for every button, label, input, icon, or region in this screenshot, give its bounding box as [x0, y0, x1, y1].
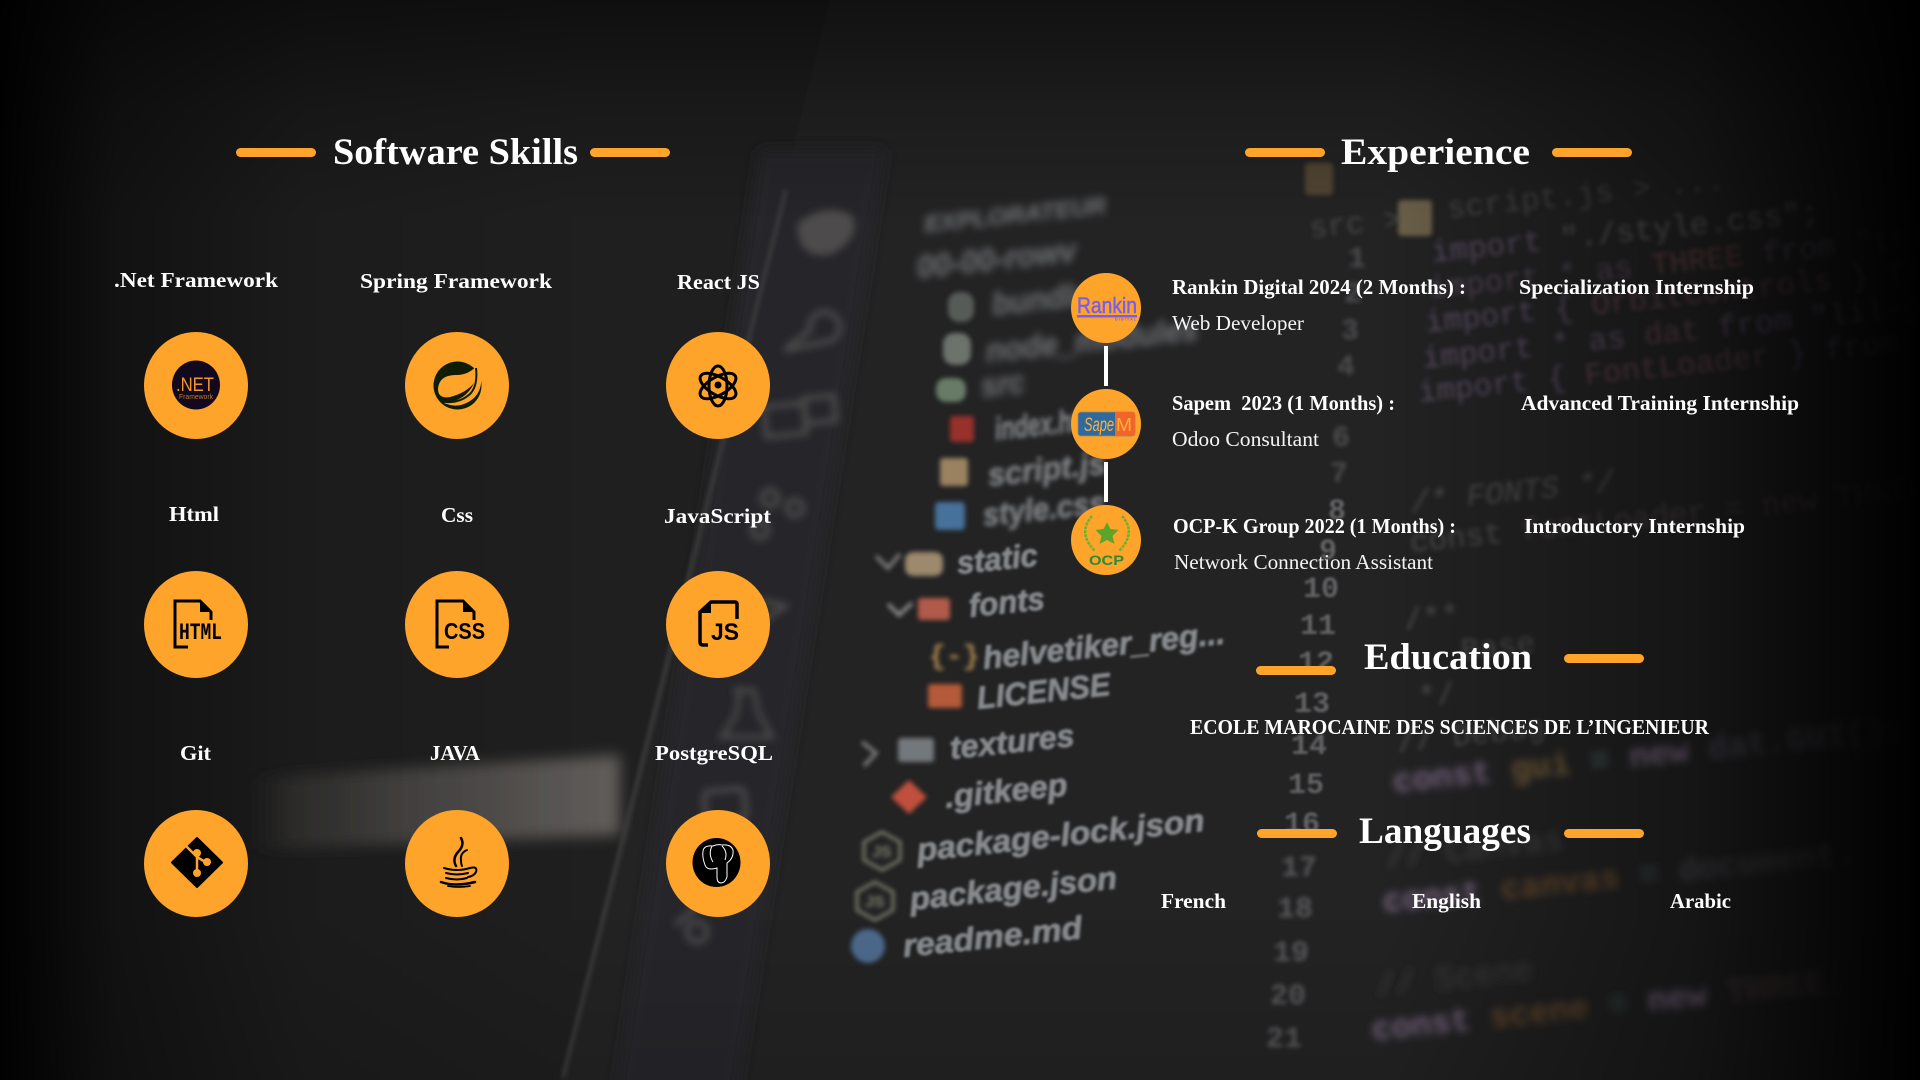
icon: Rankin Digital logo: [1071, 273, 1141, 343]
icon: PostgreSQL elephant: [666, 810, 770, 917]
text: languages list: [1161, 889, 1731, 913]
background: line numbers: 15: [1288, 769, 1324, 803]
icon: Sapem logo: Sape: [1084, 415, 1114, 436]
background: code lines: /* FONTS */: [1409, 466, 1618, 522]
background: file icons: {-}: [929, 642, 979, 673]
background: line numbers: 2: [1344, 278, 1362, 312]
background: explorer file tree: fonts: [967, 580, 1046, 624]
icon: Sapem logo: M: [1116, 415, 1132, 435]
background: code lines: // Scene: [1374, 953, 1536, 1006]
heading: Education: Education: [1364, 637, 1532, 678]
icon: OCP logo: [1071, 505, 1141, 575]
entry: Rankin Digital: [1172, 275, 1754, 335]
text: school name: ECOLE MAROCAINE DES SCIENCES DE L’INGENIEUR: [1190, 715, 1710, 739]
background: code lines: /**: [1402, 599, 1462, 640]
background: code lines: const fontLoader = new THREE: [1408, 473, 1920, 562]
background: code lines: // Debug: [1395, 712, 1547, 762]
heading: Software Skills: Software Skills: [333, 132, 578, 173]
background: line numbers: 11: [1300, 610, 1336, 644]
icon: Java cup: [405, 810, 509, 917]
icon: JS file: JS: [711, 619, 739, 646]
label: PostgreSQL: PostgreSQL: [655, 741, 773, 765]
icon: CSS file: CSS: [444, 618, 485, 644]
icon: Git diamond: [144, 810, 248, 917]
background: explorer file tree: 00-00-rowv: [915, 232, 1080, 285]
entry: Rankin Digital: Rankin Digital 2024 (2 Months) :: [1172, 275, 1466, 299]
entry: Sapem: Odoo Consultant: [1172, 427, 1319, 451]
background: code lines: */: [1416, 678, 1457, 717]
background: explorer file tree: src: [979, 364, 1027, 404]
icon: Sapem logo: [1071, 389, 1141, 459]
background: explorer file tree: LICENSE: [975, 666, 1114, 716]
background: file icons: JS: [872, 844, 892, 861]
icon: Spring leaf: [405, 332, 509, 439]
background: explorer file tree: helvetiker_reg...: [981, 615, 1226, 676]
label: JAVA: JAVA: [430, 741, 481, 765]
background: code lines: Base: [1459, 627, 1537, 670]
panel: software skills grid: [114, 268, 773, 917]
background: line numbers: 13: [1294, 688, 1330, 722]
connector: [1104, 462, 1108, 502]
icon: .NET Framework: [144, 332, 248, 439]
entry: Rankin Digital: Web Developer: [1172, 311, 1304, 335]
background: line numbers: 21: [1266, 1023, 1302, 1057]
label: .Net Framework: .Net Framework: [114, 268, 278, 292]
icon: Rankin Digital logo: Rankin: [1077, 293, 1137, 318]
background: explorer file tree: index.html: [993, 400, 1107, 447]
icon: Rankin Digital logo: DIGITAL: [1115, 318, 1137, 322]
icon: HTML file: [144, 571, 248, 678]
entry: OCP-K Group: OCP-K Group 2022 (1 Months) :: [1173, 514, 1456, 538]
background: line numbers: 14: [1291, 730, 1327, 764]
background: code lines: script.js > ...: [1445, 164, 1727, 228]
background: code lines: src >: [1307, 203, 1404, 248]
background: line numbers: 4: [1337, 351, 1355, 385]
icon: OCP logo: OCP: [1089, 552, 1124, 568]
background: explorer file tree: style.css: [981, 484, 1107, 533]
background: code lines: import { FontLoader } from: [1416, 327, 1901, 412]
label: Spring Framework: Spring Framework: [360, 269, 552, 293]
icon: .NET Framework: Framework: [179, 392, 213, 401]
icon: .NET Framework: .NET: [176, 375, 214, 396]
icon: CSS file: [405, 571, 509, 678]
heading: Languages: Languages: [1359, 811, 1531, 852]
background: line numbers: 17: [1281, 852, 1317, 886]
background: code lines: const gui = new dat.GUI();: [1391, 711, 1907, 802]
panel: experience timeline: [1071, 273, 1799, 575]
background: explorer file tree: package-lock.json: [914, 802, 1206, 868]
background: line numbers: 10: [1303, 573, 1339, 607]
background: file icons: [851, 163, 1432, 963]
icon: JS file: [666, 571, 770, 678]
connector: [1104, 346, 1108, 386]
background: line numbers: 12: [1298, 647, 1334, 681]
entry: OCP-K Group: Network Connection Assistant: [1174, 550, 1433, 574]
background: explorer file tree: readme.md: [901, 909, 1085, 964]
background: code lines: const scene = new THREE.: [1370, 963, 1847, 1050]
label: Html: Html: [169, 502, 219, 526]
label: Css: Css: [441, 503, 473, 527]
text: languages list: English: [1412, 889, 1481, 913]
heading: Software Skills: [236, 132, 670, 173]
background: explorer file tree: bundler: [990, 275, 1105, 322]
text: languages list: Arabic: [1670, 889, 1731, 913]
background: file icons: JS: [865, 894, 885, 911]
icon: HTML file: HTML: [179, 620, 222, 646]
background: line numbers: 6: [1332, 422, 1350, 456]
background: line numbers: 9: [1319, 535, 1337, 569]
background: line numbers: 7: [1330, 458, 1348, 492]
background: code lines: [1307, 164, 1920, 1050]
entry: OCP-K Group: [1173, 514, 1745, 574]
background: code lines: const canvas = document.: [1381, 835, 1858, 922]
entry: Rankin Digital: Specialization Internship: [1519, 275, 1754, 299]
background: explorer file tree: static: [955, 537, 1039, 581]
background: line numbers: 18: [1277, 893, 1313, 927]
background: explorer file tree: script.js: [986, 445, 1107, 493]
heading: Languages: [1257, 811, 1644, 852]
background: line numbers: 20: [1270, 980, 1306, 1014]
background: line numbers: 16: [1284, 808, 1320, 842]
background: explorer file tree: .gitkeep: [943, 766, 1069, 815]
label: React JS: React JS: [677, 270, 760, 294]
entry: Sapem: [1172, 391, 1799, 451]
background: line numbers: 19: [1273, 937, 1309, 971]
heading: Experience: Experience: [1341, 132, 1530, 173]
heading: Education: [1256, 637, 1644, 678]
entry: OCP-K Group: Introductory Internship: [1524, 514, 1745, 538]
background: line numbers: 3: [1341, 315, 1359, 349]
background: explorer file tree: package.json: [907, 859, 1119, 917]
label: Git: Git: [180, 741, 211, 765]
background: line numbers: 8: [1328, 495, 1346, 529]
icon: React atom: [666, 332, 770, 439]
heading: Experience: [1245, 132, 1632, 173]
text: languages list: French: [1161, 889, 1226, 913]
background: explorer file tree: node_modules: [984, 311, 1200, 369]
label: JavaScript: JavaScript: [664, 504, 771, 528]
background: explorer file tree: EXPLORATEUR: [923, 192, 1108, 237]
entry: Sapem: Sapem 2023 (1 Months) :: [1172, 391, 1395, 415]
background: line numbers: [1266, 243, 1366, 1057]
background: explorer file tree: [901, 192, 1226, 964]
background: code lines: // Canvas: [1384, 823, 1565, 878]
entry: Sapem: Advanced Training Internship: [1521, 391, 1799, 415]
background: line numbers: 1: [1348, 243, 1366, 277]
background: explorer file tree: textures: [948, 717, 1076, 766]
background: code lines: import "./style.css";: [1429, 196, 1822, 272]
